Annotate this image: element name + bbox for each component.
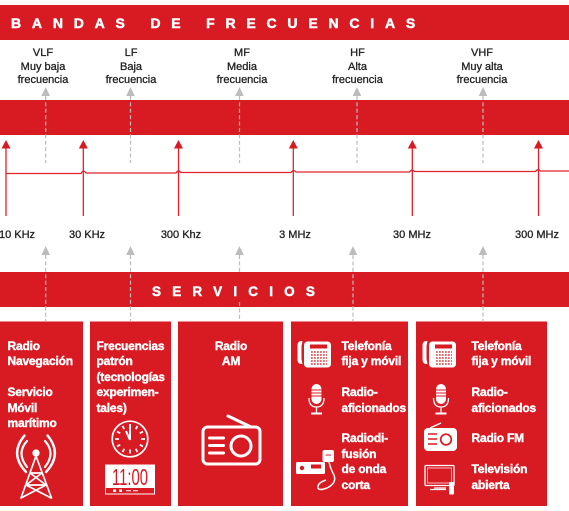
panel: VHF servicios: Televisión [472, 462, 527, 476]
panel: frecuencias patrón: tales) [96, 401, 127, 415]
panel: radio AM: AM [222, 354, 240, 368]
icon: telephone [422, 341, 456, 368]
panel: radio navegación: marítimo [8, 416, 57, 430]
panel: HF servicios: de onda [342, 462, 387, 476]
band labels: Muy baja [21, 61, 66, 73]
grey dashed arrows [41, 87, 487, 321]
icon: radio FM [424, 423, 457, 451]
panel: VHF servicios: Radio FM [472, 431, 524, 445]
icon: digital clock [105, 464, 155, 494]
band labels: frecuencia [332, 74, 384, 86]
panel: VHF servicios: abierta [472, 478, 510, 492]
frequency labels: 300 Khz [161, 229, 201, 241]
icon: microphone [309, 384, 324, 414]
band labels: VLF [33, 47, 53, 59]
frequency labels: 10 KHz [0, 229, 35, 241]
band labels: Muy alta [461, 61, 504, 73]
panel: HF servicios: fija y móvil [342, 354, 401, 368]
panel: radio navegación [0, 322, 83, 506]
band labels: frecuencia [457, 74, 508, 86]
band labels: frecuencia [217, 74, 268, 86]
panel: VHF servicios: fija y móvil [472, 354, 531, 368]
middle red band [0, 100, 569, 135]
frequency labels: 30 MHz [393, 229, 431, 241]
band labels: Media [227, 61, 258, 73]
panel: VHF servicios: Radio- [472, 385, 508, 399]
icon: CB radio [296, 450, 335, 490]
panel: radio navegación: Servicio [8, 385, 53, 399]
panel: HF servicios: Telefonía [342, 339, 392, 353]
icon: antenna tower [17, 436, 55, 498]
band labels: VHF [471, 47, 493, 59]
frequency labels: 3 MHz [279, 229, 311, 241]
panel: frecuencias patrón: Frecuencias [96, 339, 165, 353]
frequency scale with red arrows [2, 140, 569, 216]
band labels: LF [125, 47, 138, 59]
panel: frecuencias patrón: (tecnologías [96, 370, 165, 384]
icon: digital clock: 11:00 [112, 464, 148, 490]
band labels: frecuencia [18, 74, 69, 86]
icon: telephone [298, 341, 331, 368]
frequency labels: 300 MHz [515, 229, 559, 241]
panel: VHF servicios [416, 322, 547, 506]
band labels [18, 47, 508, 86]
services heading: SERVICIOS [152, 284, 326, 299]
top header band [0, 5, 569, 40]
panel: radio AM: Radio [215, 339, 247, 353]
band labels: HF [350, 47, 365, 59]
panel: HF servicios [291, 322, 408, 506]
icon: clock [112, 421, 148, 457]
panel: frecuencias patrón: experimen- [96, 385, 159, 399]
title: BANDAS DE FRECUENCIAS [11, 15, 426, 31]
icon: television [425, 466, 454, 494]
frequency labels: 30 KHz [69, 229, 105, 241]
band labels: Baja [120, 61, 143, 73]
panel: frecuencias patrón: patrón [96, 354, 133, 368]
panel: HF servicios: corta [342, 478, 370, 492]
panel: radio navegación: Navegación [8, 354, 73, 368]
panel: radio AM [178, 322, 283, 506]
icon: microphone [434, 384, 448, 414]
panel: HF servicios: Radiodi- [342, 431, 388, 445]
frequency labels [0, 229, 559, 241]
panel: VHF servicios: Telefonía [472, 339, 522, 353]
panel: radio navegación: Radio [8, 339, 40, 353]
panel: HF servicios: aficionados [342, 401, 407, 415]
panel: frecuencias patrón [90, 322, 171, 506]
band labels: frecuencia [106, 74, 157, 86]
services band [0, 272, 569, 307]
band labels: MF [234, 47, 250, 59]
panel: radio navegación: Móvil [8, 401, 37, 415]
panel: VHF servicios: aficionados [472, 401, 537, 415]
icon: radio [203, 416, 260, 464]
panel: HF servicios: fusión [342, 447, 376, 461]
band labels: Alta [348, 61, 368, 73]
panel: HF servicios: Radio- [342, 385, 378, 399]
